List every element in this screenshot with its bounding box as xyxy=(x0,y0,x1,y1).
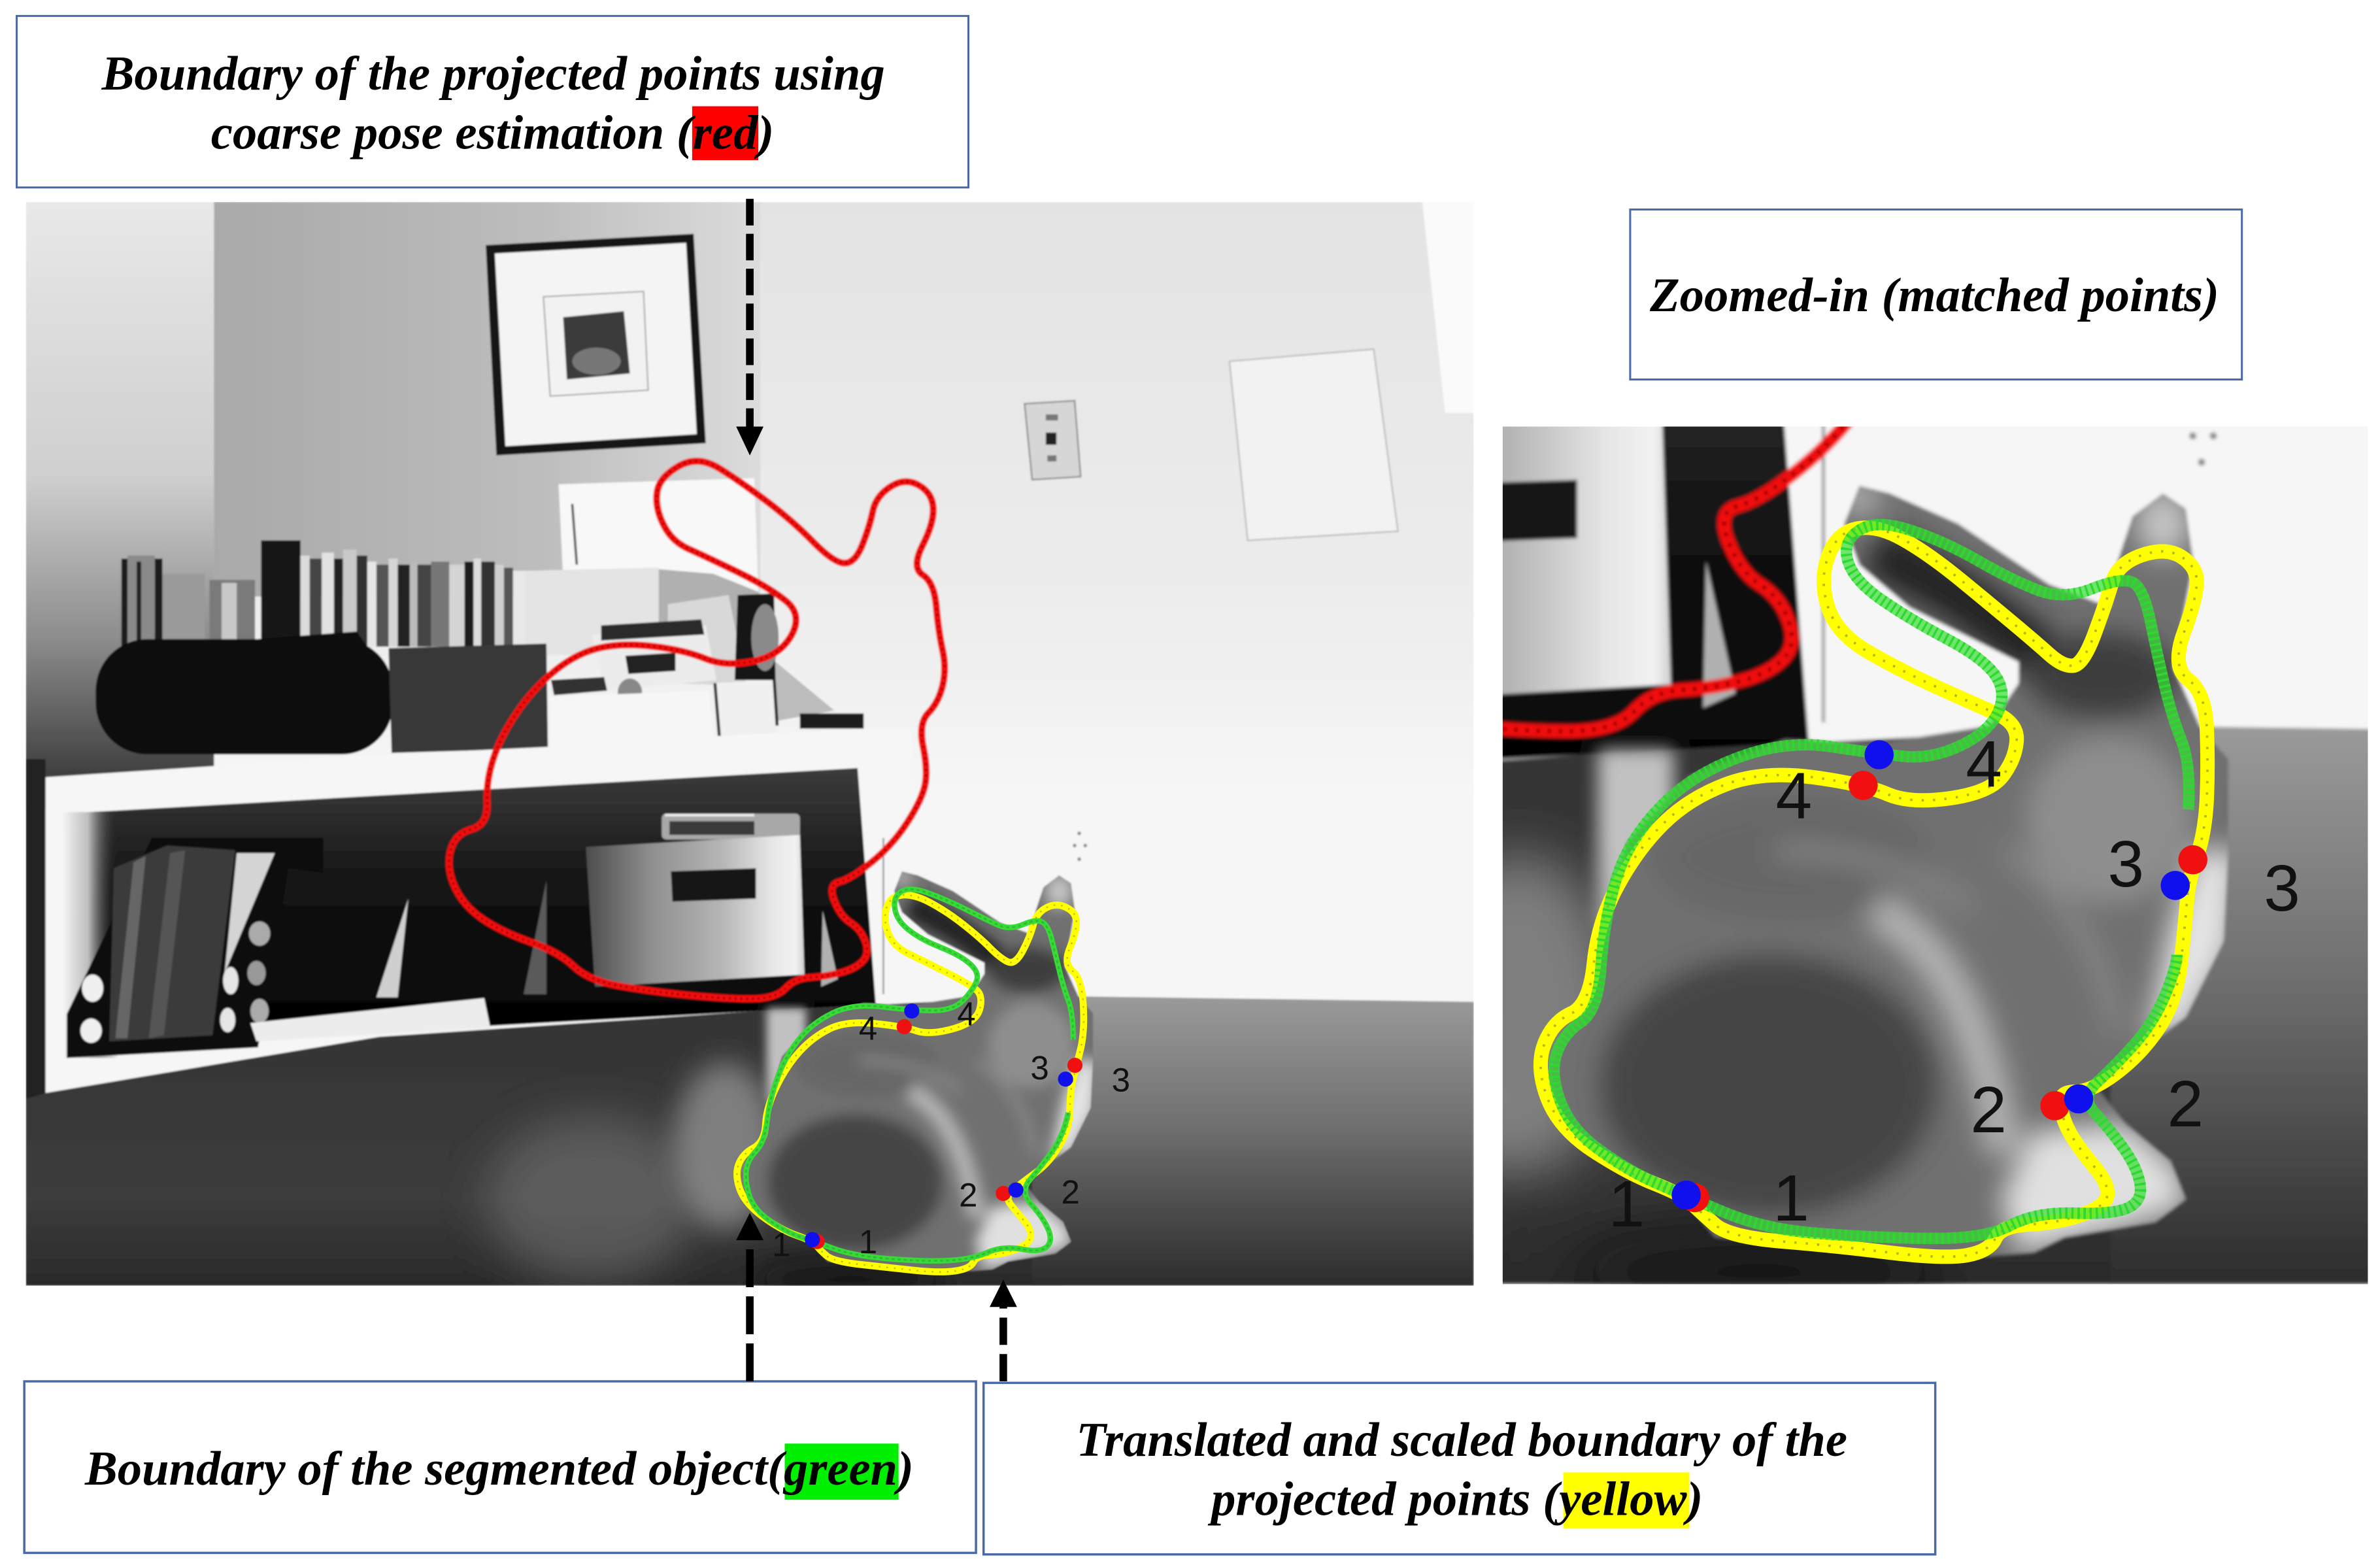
yellow boundary: translated and scaled projection xyxy=(737,895,1084,1272)
arrow: from green caption to green boundary xyxy=(736,1213,763,1381)
point numbers: 4 xyxy=(859,1010,877,1047)
callout: yellow boundary caption: Translated and scaled boundary of the xyxy=(1076,1413,1847,1467)
callout: red boundary caption xyxy=(17,16,968,188)
callout: red boundary caption: Boundary of the projected points using xyxy=(101,47,885,101)
radio xyxy=(95,632,393,754)
point numbers: 2 xyxy=(1062,1173,1080,1211)
zoomed point numbers: 2 xyxy=(1970,1074,2007,1147)
zoomed yellow boundary xyxy=(1541,528,2207,1256)
magazine holders and books xyxy=(67,838,546,1058)
callout: green boundary caption xyxy=(24,1381,976,1553)
wall light switch xyxy=(1024,401,1081,480)
left wall section xyxy=(26,314,215,779)
shelf interior xyxy=(64,768,876,1058)
bunny object xyxy=(742,870,1098,1273)
table surface xyxy=(25,759,1474,1298)
callout: green boundary caption: Boundary of the segmented object(green) xyxy=(84,1442,914,1496)
point numbers: 4 xyxy=(957,996,976,1033)
panel: zoomed-in matched points xyxy=(167,0,2380,1307)
outlet dots xyxy=(1073,832,1087,861)
right white wall edge xyxy=(1422,202,1474,413)
zoomed green boundary xyxy=(1554,524,2189,1238)
zoomed point numbers: 3 xyxy=(2108,828,2144,901)
point numbers: 2 xyxy=(959,1177,977,1214)
zoomed point numbers: 2 xyxy=(2168,1068,2204,1141)
point numbers: 1 xyxy=(859,1223,877,1260)
interior lit side xyxy=(64,812,118,1058)
metal tin xyxy=(586,814,838,986)
zoomed point numbers xyxy=(1609,728,2300,1241)
zoomed photo crop xyxy=(167,0,2380,1307)
thin wall cable line xyxy=(882,838,884,994)
arrow: from yellow caption to yellow boundary xyxy=(990,1279,1017,1381)
point numbers: 3 xyxy=(1030,1049,1049,1087)
zoomed point numbers: 4 xyxy=(1966,728,2002,801)
red boundary: coarse pose projection xyxy=(449,461,945,999)
books on top of shelf xyxy=(122,541,525,652)
middle shaded wall section xyxy=(214,202,760,597)
papers and clutter on shelf xyxy=(525,478,863,737)
zoomed point numbers: 3 xyxy=(2264,852,2300,925)
point numbers: 3 xyxy=(1112,1062,1130,1099)
storage box xyxy=(388,644,548,753)
arrow: from red caption to red boundary xyxy=(736,199,763,456)
matched point markers xyxy=(805,1003,1082,1249)
callout: zoomed-in caption xyxy=(1630,209,2242,379)
paper on wall xyxy=(1230,349,1398,541)
wall xyxy=(25,202,1474,1286)
zoomed matched point markers xyxy=(1671,740,2207,1212)
callout: red boundary caption: coarse pose estimation (red) xyxy=(211,107,774,160)
zoomed point numbers: 4 xyxy=(1776,760,1812,833)
zoomed point numbers: 1 xyxy=(1773,1162,1809,1235)
point numbers: 1 xyxy=(772,1226,791,1263)
callout: zoomed-in caption: Zoomed-in (matched points) xyxy=(1649,269,2219,322)
panel: main photograph with projected boundaries xyxy=(25,202,1474,1298)
shelf white body xyxy=(46,691,911,1093)
photo scene: room with shelf, table and bunny xyxy=(25,202,1474,1298)
callout: yellow boundary caption xyxy=(984,1383,1936,1555)
zoomed point numbers: 1 xyxy=(1609,1168,1645,1241)
picture frame xyxy=(486,234,706,456)
point numbers xyxy=(772,996,1130,1263)
green boundary: segmented object xyxy=(746,889,1073,1261)
white papers on lower shelf xyxy=(250,998,490,1041)
callout: yellow boundary caption: projected points (yellow) xyxy=(1207,1472,1703,1526)
